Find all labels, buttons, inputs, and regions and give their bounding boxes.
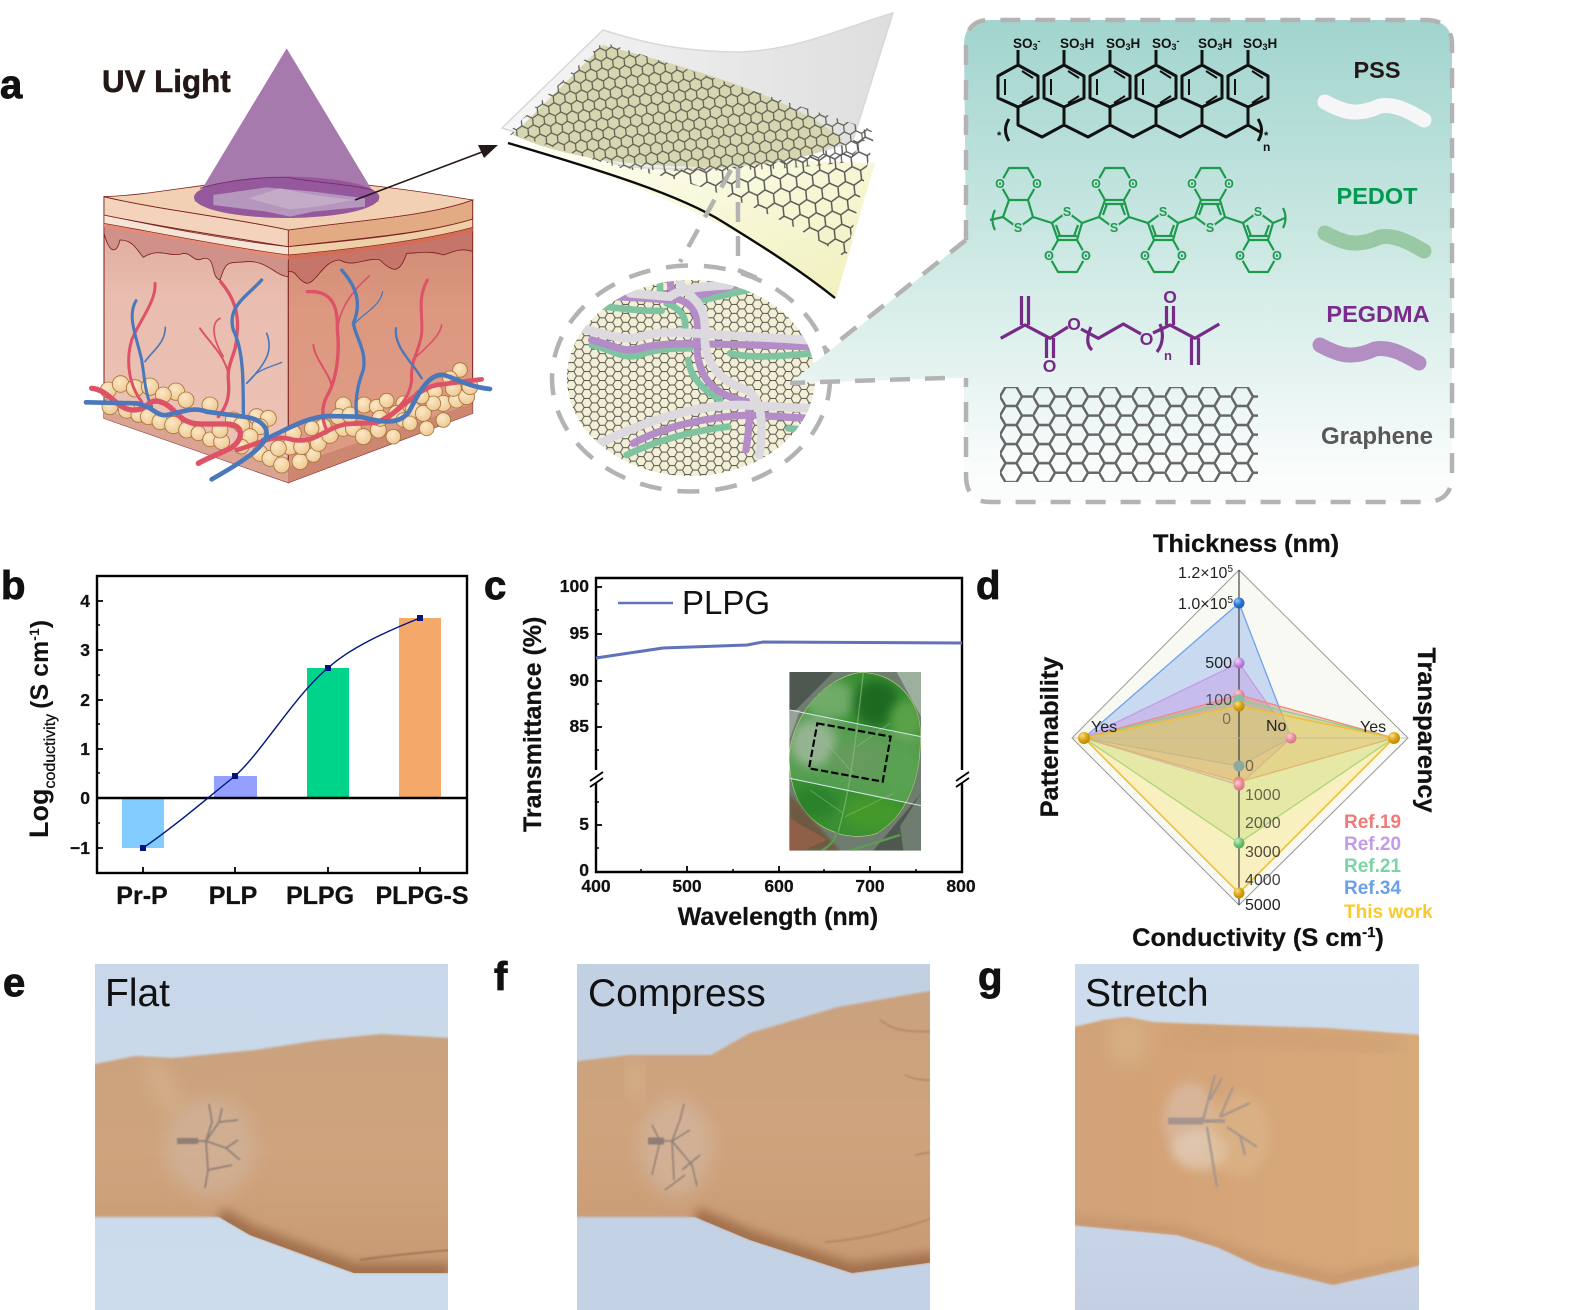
y axis title: coductivity xyxy=(42,714,59,789)
PEDOT structure: O xyxy=(1224,177,1234,191)
illustration: flexible film with graphene sheet xyxy=(502,13,893,298)
illustration: skin cube with patch under UV cone xyxy=(86,48,490,483)
PSS structure: 3 xyxy=(1033,42,1038,52)
conductivity scale xyxy=(1245,758,1281,914)
wrist shading xyxy=(688,1020,930,1273)
axes frame xyxy=(97,576,467,873)
graphene sheet, lower part xyxy=(510,43,875,258)
skin cube right face xyxy=(288,200,473,483)
radar legend xyxy=(1344,812,1433,923)
PEDOT structure: O xyxy=(1235,249,1245,263)
legend: PEDOT xyxy=(1325,183,1424,251)
callout: dashed lines from sheet to zoom circle xyxy=(680,168,757,278)
y axis title: Transmittance (%) xyxy=(519,617,547,832)
bar PLPG-S xyxy=(399,618,441,798)
series Ref.19 xyxy=(1084,695,1394,782)
panel background with callout wedge xyxy=(790,20,1452,502)
transfer patch xyxy=(164,1097,256,1197)
PSS structure: SO xyxy=(1106,36,1126,51)
axis title: Conductivity: ) xyxy=(1375,924,1384,952)
PEDOT structure: O xyxy=(1177,249,1187,263)
wrist xyxy=(90,1034,450,1273)
bar Pr-P xyxy=(122,798,164,848)
x tick labels: 400 xyxy=(581,876,611,896)
leaf body xyxy=(789,672,920,836)
photo label Stretch: Stretch xyxy=(1085,972,1209,1015)
photo f: compressed wrist xyxy=(570,964,935,1310)
y tick labels: 4 xyxy=(80,591,90,611)
x category labels xyxy=(116,882,469,910)
polymer strands xyxy=(580,280,812,455)
axis title: Thickness: Thickness (nm) xyxy=(1153,530,1339,558)
thickness scale: 1.0×10 xyxy=(1178,596,1227,613)
conductivity scale: 1000 xyxy=(1245,787,1281,804)
photo g: stretched wrist xyxy=(1070,964,1422,1310)
finger creases xyxy=(825,1020,932,1242)
y tick labels: 5 xyxy=(579,814,589,834)
conductivity scale: 4000 xyxy=(1245,872,1281,889)
graphene lattice sample xyxy=(1000,387,1258,482)
wrist shading xyxy=(152,1069,448,1273)
transfer patch xyxy=(640,1097,712,1197)
PSS structure: 3 xyxy=(1172,42,1177,52)
y tick labels: 3 xyxy=(80,640,90,660)
chart b: conductivity bars xyxy=(24,576,469,910)
PSS structure xyxy=(997,36,1277,154)
conductivity scale: 3000 xyxy=(1245,844,1281,861)
panel label c: c xyxy=(484,564,506,608)
data markers xyxy=(1078,598,1400,898)
UV cone xyxy=(194,48,379,202)
legend: PEDOT: PEDOT xyxy=(1337,183,1418,209)
PEDOT structure: O xyxy=(1140,249,1150,263)
series Ref.34 xyxy=(1084,603,1291,766)
panel label e: e xyxy=(3,961,25,1005)
olive contact area xyxy=(513,45,843,167)
PSS structure: H xyxy=(1223,36,1232,51)
x tick labels: 800 xyxy=(946,876,976,896)
photo label Flat: Flat xyxy=(105,972,170,1015)
PSS structure: H xyxy=(1268,36,1277,51)
panel dashed outline xyxy=(790,20,1452,502)
axis title: Transparency: Transparency xyxy=(1412,647,1440,813)
PSS structure: H xyxy=(1085,36,1094,51)
panel label a: a xyxy=(0,63,23,107)
PEDOT structure: S xyxy=(1206,221,1214,235)
radar legend: Ref.20 xyxy=(1344,834,1401,855)
x tick labels: 700 xyxy=(855,876,885,896)
radar axes xyxy=(1238,570,1240,905)
circle fill xyxy=(567,280,815,476)
PEGDMA structure: O xyxy=(1067,314,1081,334)
panel label f: f xyxy=(494,955,508,999)
series This work xyxy=(1084,706,1394,893)
top film xyxy=(502,13,893,169)
PEDOT structure: O xyxy=(1044,249,1054,263)
y tick labels xyxy=(70,591,90,858)
PSS structure: n xyxy=(1263,140,1270,154)
PSS structure: SO xyxy=(1013,36,1033,51)
arrow: patch to film xyxy=(355,145,498,200)
film patch on skin xyxy=(213,187,365,217)
substrate edge xyxy=(508,143,835,298)
top edge of light footprint xyxy=(200,177,372,190)
graphene lattice xyxy=(567,280,815,476)
PSS structure: 3 xyxy=(1126,42,1131,52)
conductive tree pattern xyxy=(1168,1075,1257,1187)
PEDOT structure: O xyxy=(1187,177,1197,191)
graphene sheet, upper part xyxy=(508,42,873,171)
UV light footprint xyxy=(194,177,379,218)
PEDOT structure xyxy=(990,168,1286,272)
PEDOT structure: S xyxy=(1063,205,1071,219)
PEDOT structure: S xyxy=(1254,205,1262,219)
PSS structure: SO xyxy=(1060,36,1080,51)
fit curve with points xyxy=(140,615,423,851)
x category labels: PLP xyxy=(209,882,257,910)
y axis title: ) xyxy=(26,620,54,628)
y axis title: Log xyxy=(24,789,54,838)
x axis title: Wavelength (nm) xyxy=(678,903,878,931)
blood vessels xyxy=(86,270,490,479)
radar legend: This work xyxy=(1344,902,1433,923)
heading: UV Light: UV Light xyxy=(102,64,231,99)
x category labels: PLPG-S xyxy=(375,882,469,910)
y tick labels: 0 xyxy=(80,788,90,808)
PEDOT structure: O xyxy=(995,177,1005,191)
axis title: Conductivity: Conductivity (S cm xyxy=(1132,924,1362,952)
PEDOT structure: S xyxy=(1110,221,1118,235)
legend: PEGDMA xyxy=(1320,301,1430,363)
photo label Compress: Compress xyxy=(588,972,766,1015)
legend: PSS xyxy=(1325,57,1424,120)
transparency and patternability ticks: Yes xyxy=(1091,719,1117,736)
PSS structure: 3 xyxy=(1218,42,1223,52)
y tick labels: −1 xyxy=(70,838,90,858)
PSS structure: * xyxy=(1264,130,1269,142)
y axis title: -1 xyxy=(26,628,42,641)
leaf photo inset xyxy=(789,672,923,851)
panel: molecular structures xyxy=(790,20,1452,502)
PEGDMA structure: O xyxy=(1140,329,1153,349)
axis title: Conductivity: -1 xyxy=(1362,924,1375,941)
y tick labels: 90 xyxy=(570,670,589,690)
PEDOT structure: S xyxy=(1159,205,1167,219)
series Ref.20 xyxy=(1084,663,1291,785)
axes frame xyxy=(590,578,969,872)
PEDOT structure: O xyxy=(1081,249,1091,263)
radar legend: Ref.34 xyxy=(1344,878,1401,899)
thickness scale xyxy=(1178,564,1233,728)
panel label d: d xyxy=(976,564,1000,608)
legend: PSS: PSS xyxy=(1353,57,1401,83)
x tick labels: 600 xyxy=(764,876,794,896)
photo e: flat wrist xyxy=(90,964,450,1310)
thickness scale: 1.2×10 xyxy=(1178,565,1227,582)
PSS structure: H xyxy=(1131,36,1140,51)
conductivity scale: 2000 xyxy=(1245,815,1281,832)
PSS structure: 3 xyxy=(1263,42,1268,52)
y tick labels xyxy=(560,576,589,880)
transparency and patternability ticks xyxy=(1091,718,1386,736)
fat cells xyxy=(100,363,478,473)
PEGDMA structure: O xyxy=(1163,287,1177,307)
thickness scale: 5 xyxy=(1227,595,1233,606)
legend: PEGDMA: PEGDMA xyxy=(1326,301,1430,327)
skin cube left face xyxy=(104,197,288,483)
x tick labels: 500 xyxy=(672,876,702,896)
panel label g: g xyxy=(978,955,1002,999)
PEDOT structure: O xyxy=(1032,177,1042,191)
conductive tree pattern xyxy=(177,1104,240,1188)
panel label b: b xyxy=(1,564,25,608)
transparency and patternability ticks: Yes xyxy=(1360,719,1386,736)
chart c: transmittance xyxy=(519,576,976,931)
PEDOT structure: O xyxy=(1091,177,1101,191)
skin layers xyxy=(104,197,473,483)
PEDOT structure: O xyxy=(1272,249,1282,263)
radar legend: Ref.19 xyxy=(1344,812,1401,833)
thickness scale: 500 xyxy=(1205,655,1232,672)
radar legend: Ref.21 xyxy=(1344,856,1401,877)
PEGDMA structure: n xyxy=(1164,348,1172,363)
PSS structure: - xyxy=(1177,36,1180,46)
PSS structure: - xyxy=(1038,36,1041,46)
yellow substrate xyxy=(508,143,875,298)
zoomed circle: polymer strands on graphene xyxy=(567,280,815,476)
thickness scale: 100 xyxy=(1205,692,1232,709)
PSS structure: SO xyxy=(1243,36,1263,51)
y tick labels: 2 xyxy=(80,690,90,710)
thickness scale: 0 xyxy=(1222,711,1231,728)
y tick labels: 85 xyxy=(570,716,589,736)
series Ref.21 xyxy=(1084,700,1394,843)
PSS structure: 3 xyxy=(1080,42,1085,52)
y tick labels: 100 xyxy=(560,576,589,596)
dashed ring around zoom circle xyxy=(552,266,830,492)
x category labels: PLPG xyxy=(286,882,354,910)
PEDOT structure: O xyxy=(1128,177,1138,191)
wrist shading xyxy=(1075,1014,1419,1280)
y tick labels: 1 xyxy=(80,739,90,759)
x tick labels xyxy=(581,876,976,896)
radar background xyxy=(1072,570,1408,905)
PEGDMA structure xyxy=(1001,287,1219,376)
transparency and patternability ticks: No xyxy=(1266,718,1287,735)
skin top surface xyxy=(104,177,473,230)
PEDOT structure: S xyxy=(1014,221,1022,235)
wrist xyxy=(1070,1017,1422,1285)
legend: PLPG xyxy=(682,584,770,621)
conductive tree pattern xyxy=(648,1104,700,1190)
y axis title: (S cm xyxy=(26,641,54,709)
transfer patch xyxy=(1164,1082,1270,1177)
PEGDMA structure: O xyxy=(1043,356,1056,376)
PSS structure: SO xyxy=(1152,36,1172,51)
bar PLP xyxy=(214,776,257,798)
transmittance curve xyxy=(596,642,962,658)
PSS structure: * xyxy=(997,130,1002,142)
legend: Graphene: Graphene xyxy=(1321,423,1433,450)
y tick labels: 95 xyxy=(570,623,589,643)
chart d: radar comparison xyxy=(1036,530,1440,952)
x category labels: Pr-P xyxy=(116,882,168,910)
conductivity scale: 5000 xyxy=(1245,897,1281,914)
wrist and hand xyxy=(570,990,935,1273)
thickness scale: 5 xyxy=(1227,564,1233,575)
axis title: Patternability: Patternability xyxy=(1036,657,1064,817)
PSS structure: SO xyxy=(1198,36,1218,51)
conductivity scale: 0 xyxy=(1245,758,1254,775)
y tick labels: 0 xyxy=(579,860,589,880)
bar PLPG xyxy=(307,668,349,798)
